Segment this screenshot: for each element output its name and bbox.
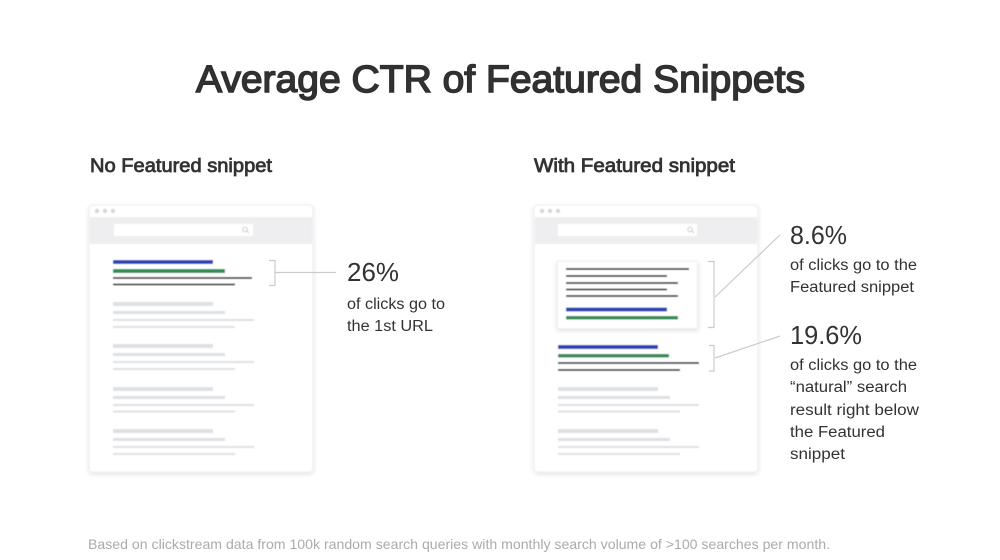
- bracket and leader: 26%: [269, 260, 336, 286]
- text: 19.6% description: snippet: [790, 446, 846, 463]
- bracket and leader: 19.6%: [709, 336, 780, 371]
- text: 8.6% description: of clicks go to the: [790, 257, 917, 274]
- bracket and leader: 8.6%: [708, 235, 780, 328]
- panel: browser mockup with featured snippet: [534, 205, 758, 472]
- stat: 26%: 26%: [347, 257, 399, 287]
- footnote: Based on clickstream data from 100k random search queries with monthly search volume of >100 searches per month.: [88, 536, 830, 552]
- text: 8.6% description: Featured snippet: [790, 279, 915, 296]
- text: 19.6% description: result right below: [790, 402, 920, 419]
- text: 26% description: [347, 296, 445, 335]
- text: 19.6% description: [790, 357, 920, 463]
- text: 26% description: the 1st URL: [347, 318, 433, 335]
- text: 26% description: of clicks go to: [347, 296, 445, 313]
- stat: 19.6%: 19.6%: [790, 320, 862, 350]
- text: 19.6% description: the Featured: [790, 424, 885, 441]
- title: Average CTR of Featured Snippets: [196, 59, 805, 101]
- panel: browser mockup without featured snippet: [89, 205, 313, 472]
- text: 19.6% description: “natural” search: [790, 379, 907, 396]
- heading: no featured snippet: No Featured snippet: [90, 155, 273, 177]
- text: 19.6% description: of clicks go to the: [790, 357, 917, 374]
- text: 8.6% description: [790, 257, 917, 296]
- featured snippet card: [558, 262, 698, 328]
- heading: with featured snippet: With Featured snippet: [534, 155, 736, 177]
- stat: 8.6%: 8.6%: [790, 220, 847, 250]
